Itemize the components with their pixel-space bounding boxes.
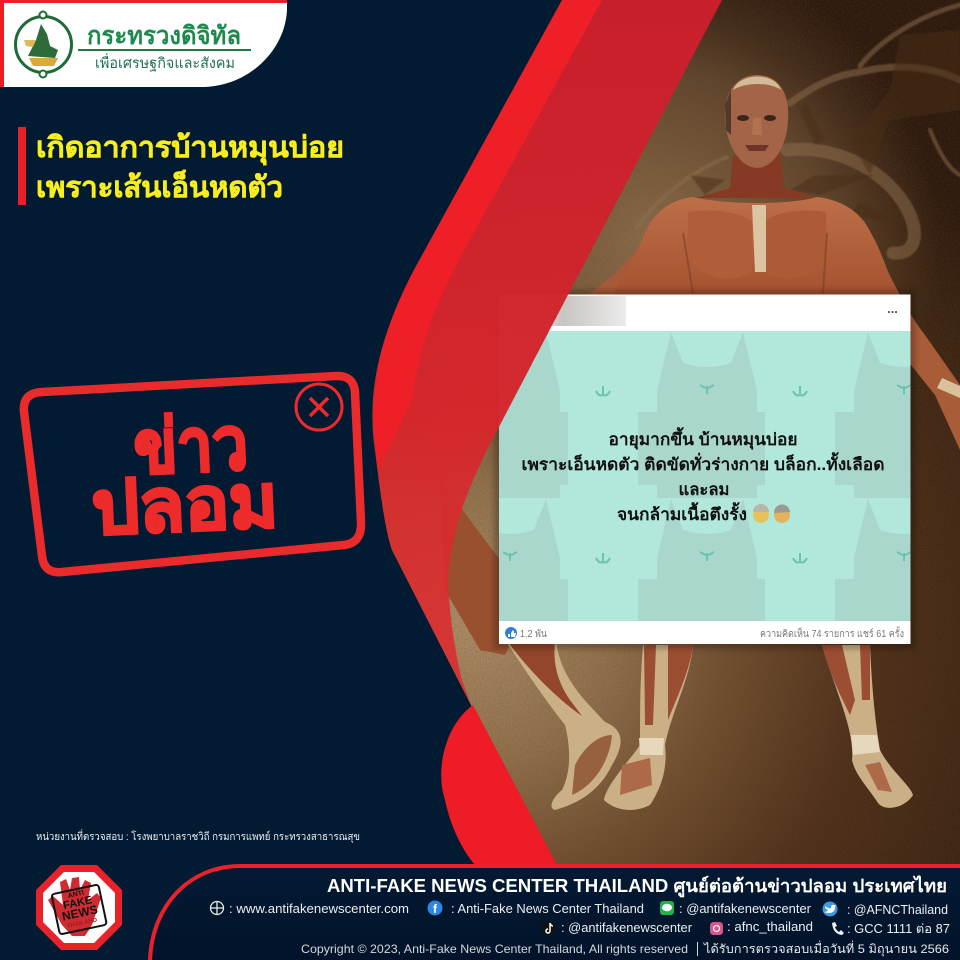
footer — [150, 866, 960, 960]
logo text: FAKE — [62, 894, 93, 912]
red lobe — [441, 705, 557, 865]
icon: ministry emblem — [16, 12, 72, 78]
phone number: : GCC 1111 ต่อ 87 — [847, 922, 950, 936]
post message text: อายุมากขึ้น บ้านหมุนบ่อย — [608, 427, 798, 450]
ministry tagline: เพื่อเศรษฐกิจและสังคม — [95, 53, 235, 72]
logo text: ANTI — [67, 890, 85, 900]
website: : www.antifakenewscenter.com — [229, 902, 409, 916]
like count: 1.2 พัน — [520, 629, 547, 640]
stamp text — [90, 402, 280, 550]
icon: twitter — [822, 902, 838, 916]
logo text — [58, 888, 100, 930]
icon: instagram — [710, 922, 723, 935]
icon: line — [660, 901, 674, 915]
post message text — [522, 427, 884, 524]
figure left arm — [588, 246, 639, 294]
figure torso — [630, 197, 896, 294]
post background with cat pattern — [499, 331, 910, 621]
tiktok account: : @antifakenewscenter — [561, 921, 692, 935]
stamp text: ข่าว — [132, 402, 250, 489]
fake news stamp — [24, 376, 361, 572]
figure right leg and foot — [822, 645, 913, 808]
logo text: THAILAND — [66, 917, 98, 930]
icon: phone — [832, 922, 844, 935]
red diagonal band — [372, 0, 722, 705]
stamp text: ปลอม — [90, 459, 280, 550]
twitter account: : @AFNCThailand — [847, 903, 948, 917]
headline: เกิดอาการบ้านหมุนบ่อย — [36, 132, 344, 165]
icon: like — [505, 627, 517, 639]
footer title: ANTI-FAKE NEWS CENTER THAILAND ศูนย์ต่อต้านข่าวปลอม ประเทศไทย — [327, 875, 947, 898]
figure right arm — [888, 271, 960, 450]
icon: red hand — [48, 877, 101, 936]
post message text: จนกล้ามเนื้อตึงรั้ง — [617, 502, 747, 524]
icon: facebook — [428, 900, 442, 916]
figure neck — [696, 155, 818, 198]
figure left thigh — [448, 510, 509, 655]
post message text: และลม — [678, 481, 730, 499]
headline: เพราะเส้นเอ็นหดตัว — [36, 169, 283, 204]
logo panel — [0, 0, 287, 87]
anti fake news stop sign logo — [36, 865, 122, 950]
post message text: เพราะเอ็นหดตัว ติดขัดทั่วร่างกาย บล็อก..ทั้งเลือด — [522, 452, 884, 474]
blurred account name — [501, 296, 626, 326]
icon: globe — [210, 902, 224, 914]
comments and shares: ความคิดเห็น 74 รายการ แชร์ 61 ครั้ง — [760, 626, 904, 640]
Facebook post card — [494, 290, 915, 649]
logo text: NEWS — [61, 902, 99, 924]
headline — [18, 127, 344, 205]
figure pectorals — [683, 205, 827, 293]
icon: facebook: f — [433, 902, 438, 916]
photo: anatomical figure on parchment — [360, 0, 960, 865]
icon: tiktok — [542, 921, 556, 935]
figure centre leg and foot — [604, 645, 693, 810]
verification date: ได้รับการตรวจสอบเมื่อวันที่ 5 มิถุนายน 2566 — [703, 940, 949, 957]
verifying agency: หน่วยงานที่ตรวจสอบ : โรงพยาบาลราชวิถี กรมการแพทย์ กระทรวงสาธารณสุข — [36, 829, 360, 843]
figure head — [725, 75, 788, 168]
icon: older person emoji — [753, 504, 790, 523]
facebook page: : Anti-Fake News Center Thailand — [451, 902, 644, 916]
copyright: Copyright © 2023, Anti-Fake News Center Thailand, All rights reserved — [301, 942, 688, 956]
line account: : @antifakenewscenter — [679, 902, 811, 916]
more options dots: ... — [887, 301, 898, 316]
ministry name: กระทรวงดิจิทัล — [87, 22, 241, 50]
figure left leg and raised foot — [505, 640, 621, 810]
icon: cross in circle — [296, 384, 342, 430]
instagram account: : afnc_thailand — [727, 920, 813, 934]
